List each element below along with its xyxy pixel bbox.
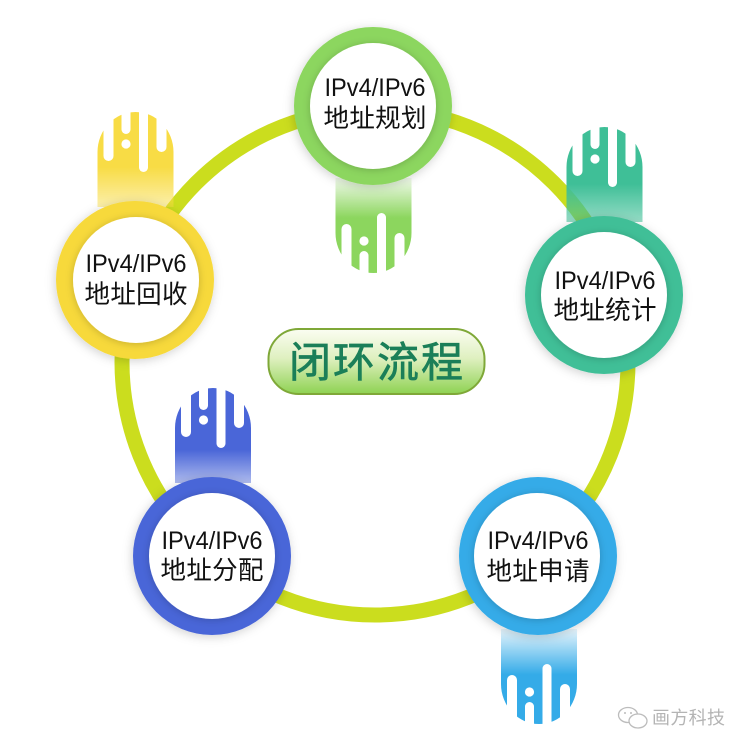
disc: white: [310, 43, 436, 169]
label: 地址回收: [84, 274, 188, 311]
tab: blue: [175, 370, 251, 483]
label: [324, 74, 426, 135]
label: [554, 267, 656, 327]
tab: yellow: [98, 94, 174, 207]
disc: white: [73, 217, 199, 343]
node: address reclamation: [56, 94, 214, 359]
ring: cyan: [459, 477, 617, 635]
node: address application: [459, 477, 617, 742]
label: IPv4/IPv6: [324, 74, 426, 102]
watermark text: 画方科技: [652, 704, 725, 730]
tab: teal: [566, 109, 642, 222]
watermark: [618, 704, 725, 730]
center badge: closed-loop process: 闭环流程: [289, 329, 463, 390]
ring: yellow: [56, 201, 214, 359]
disc: white: [149, 493, 275, 619]
tab: cyan: [501, 629, 577, 742]
label: [84, 250, 188, 311]
ring: blue: [133, 477, 291, 635]
label: IPv4/IPv6: [86, 250, 186, 278]
icon: chat bubbles: [618, 708, 647, 728]
label: 地址分配: [160, 550, 264, 587]
loop ring: [122, 109, 628, 615]
label: [486, 527, 590, 588]
label: 地址申请: [486, 551, 590, 588]
tab: green: [336, 178, 412, 291]
label: IPv4/IPv6: [162, 527, 262, 555]
node: address allocation: [133, 370, 291, 635]
node: address planning: [294, 27, 452, 291]
disc: white: [541, 232, 667, 358]
label: 地址统计: [554, 290, 656, 327]
ring: green: [294, 27, 452, 185]
label: IPv4/IPv6: [488, 527, 588, 555]
label: [160, 527, 264, 587]
node: address statistics: [525, 109, 683, 374]
label: 地址规划: [324, 98, 426, 135]
disc: white: [474, 493, 600, 619]
label: IPv4/IPv6: [554, 267, 656, 295]
ring: teal: [525, 216, 683, 374]
